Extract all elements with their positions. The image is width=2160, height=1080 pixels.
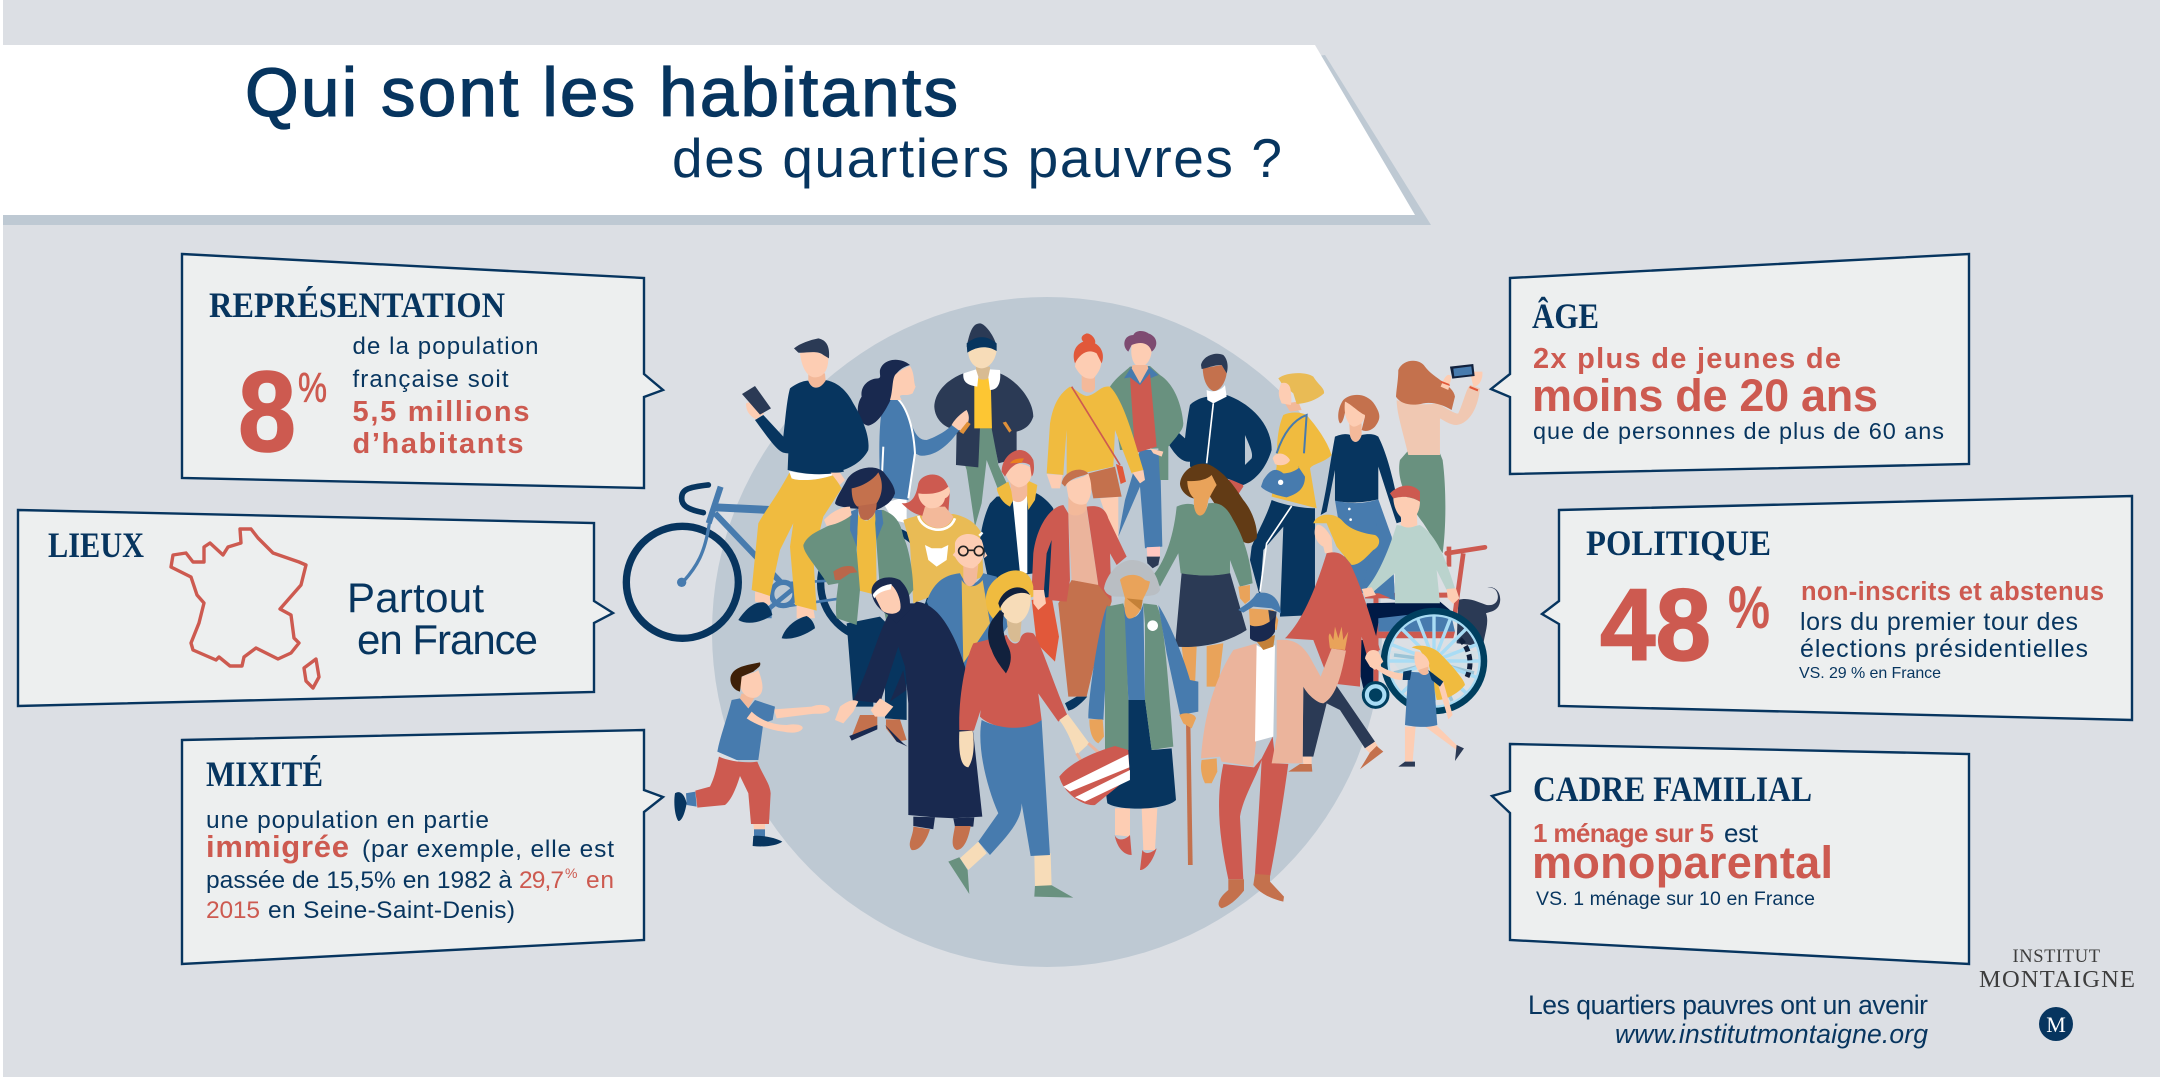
logo: Institut Montaigne bbox=[1979, 947, 2135, 1041]
panel: âge bbox=[1491, 254, 1969, 474]
text: abstenus: non-inscrits et abstenus bbox=[1801, 578, 2104, 606]
panel: cadre familial bbox=[1492, 744, 1969, 964]
panel: lieux bbox=[18, 510, 613, 706]
icon: wheelchair wheel bbox=[1384, 611, 1484, 711]
title banner bbox=[0, 45, 1431, 225]
logo: Institut Montaigne: MONTAIGNE bbox=[1979, 966, 2135, 993]
panel: représentation: d’habitants bbox=[352, 428, 524, 460]
panel: cadre familial: monoparental bbox=[1532, 837, 1833, 888]
heading: cadre familial: CADRE FAMILIAL bbox=[1533, 769, 1812, 809]
figure: woman taking a selfie bbox=[1396, 361, 1482, 553]
panel: mixité: en bbox=[586, 867, 614, 894]
logo: Institut Montaigne: M bbox=[2046, 1012, 2066, 1037]
panel: mixité: % bbox=[565, 865, 577, 881]
figure: man with beanie and dark jacket bbox=[934, 323, 1033, 527]
text: partout en France: Partout bbox=[347, 574, 484, 621]
figure: woman with navy top and jeans bbox=[1321, 395, 1402, 600]
text: population: de la population bbox=[352, 333, 538, 360]
panel: mixité: passée de 15,5% en 1982 à bbox=[206, 867, 512, 894]
heading: mixité: MIXITÉ bbox=[206, 754, 323, 794]
panel: politique: % bbox=[1728, 574, 1770, 641]
panel: mixité: 29,7 bbox=[519, 867, 564, 894]
heading: politique: POLITIQUE bbox=[1586, 523, 1771, 563]
panel: mixité: en Seine-Saint-Denis) bbox=[268, 897, 515, 924]
panel: représentation: % bbox=[298, 364, 327, 411]
background circle bbox=[712, 297, 1382, 967]
panel: mixité: immigrée bbox=[206, 829, 349, 864]
figure: man with yellow hood and navy jacket bbox=[980, 450, 1053, 607]
figure: man in navy jacket holding phone bbox=[1150, 354, 1272, 497]
figure: elderly woman with cane bbox=[1088, 560, 1198, 870]
panel: mixité bbox=[182, 730, 663, 964]
crowd illustration bbox=[626, 323, 1500, 908]
text: population immigrée: une population en partie bbox=[206, 807, 489, 834]
figure: little girl with blond hair bbox=[1373, 646, 1465, 767]
panel: cadre familial: est bbox=[1724, 818, 1759, 848]
heading: âge: ÂGE bbox=[1532, 296, 1599, 336]
figure: bald man with round glasses bbox=[927, 532, 1010, 690]
heading: représentation: REPRÉSENTATION bbox=[209, 285, 505, 325]
text: 5,5 millions: 5,5 millions bbox=[352, 396, 530, 428]
panel: représentation: française soit bbox=[352, 366, 509, 393]
figure: bearded man with blue cap bbox=[1201, 593, 1348, 908]
panel: politique: élections présidentielles bbox=[1800, 635, 2088, 663]
figure: caster wheel bbox=[1363, 683, 1388, 707]
panel: lieux: en France bbox=[357, 616, 538, 663]
figure: man on bicycle with phone bbox=[738, 338, 869, 639]
title: Qui sont les habitants bbox=[245, 54, 958, 131]
figure: man with purple hair and green jacket bbox=[1110, 331, 1183, 568]
figure: blond woman with blue bag bbox=[1250, 373, 1332, 617]
striped bag bbox=[1059, 746, 1130, 805]
panel: représentation bbox=[182, 254, 663, 488]
figure: woman with halo, red sweater and striped bag bbox=[948, 570, 1103, 898]
text: jeunes: 2x plus de jeunes de bbox=[1533, 343, 1841, 375]
panel: politique: VS. 29 % en France bbox=[1799, 665, 1941, 682]
subtitle: des quartiers pauvres ? bbox=[672, 127, 1282, 189]
figure: man in red cardigan bbox=[1032, 470, 1127, 711]
figure: woman in dark robe and headscarf bbox=[835, 577, 982, 850]
figure: woman with red bun and yellow sweater bbox=[1047, 333, 1145, 540]
figure: woman with blazer and curly dark hair bbox=[803, 468, 913, 747]
footer tagline: www.institutmontaigne.org bbox=[1615, 1019, 1928, 1049]
icon: map of France bbox=[171, 529, 319, 688]
panel: politique: lors du premier tour des bbox=[1800, 608, 2078, 636]
stat: 48 %: 48 bbox=[1600, 568, 1711, 682]
figure: boy in wheelchair with dog bbox=[1362, 486, 1500, 711]
panel: cadre familial: VS. 1 ménage sur 10 en France bbox=[1536, 888, 1815, 910]
figure: running boy bbox=[674, 662, 830, 846]
figure: woman in green sweater with long hair bbox=[1153, 464, 1257, 687]
panel: âge: moins de 20 ans bbox=[1532, 370, 1878, 421]
footer tagline bbox=[1528, 990, 1928, 1049]
panel: mixité: (par exemple, elle est bbox=[362, 836, 614, 863]
heading: lieux: LIEUX bbox=[48, 525, 144, 565]
logo: Institut Montaigne: INSTITUT bbox=[2012, 947, 2100, 967]
figure: woman in red coat with blond hair bbox=[1285, 515, 1383, 772]
panel: mixité: 2015 bbox=[206, 897, 260, 924]
text: monoparental: 1 ménage sur 5 bbox=[1533, 818, 1714, 848]
footer tagline: Les quartiers pauvres ont un avenir bbox=[1528, 990, 1928, 1020]
stat: 8%: 8 bbox=[238, 349, 296, 476]
panel: politique bbox=[1542, 496, 2132, 720]
figure: woman with red hair and cat t-shirt bbox=[902, 475, 983, 603]
figure: bicycle bbox=[626, 485, 933, 639]
panel: âge: que de personnes de plus de 60 ans bbox=[1533, 418, 1944, 444]
figure: woman with dark ponytail and blue jacket bbox=[858, 360, 971, 523]
